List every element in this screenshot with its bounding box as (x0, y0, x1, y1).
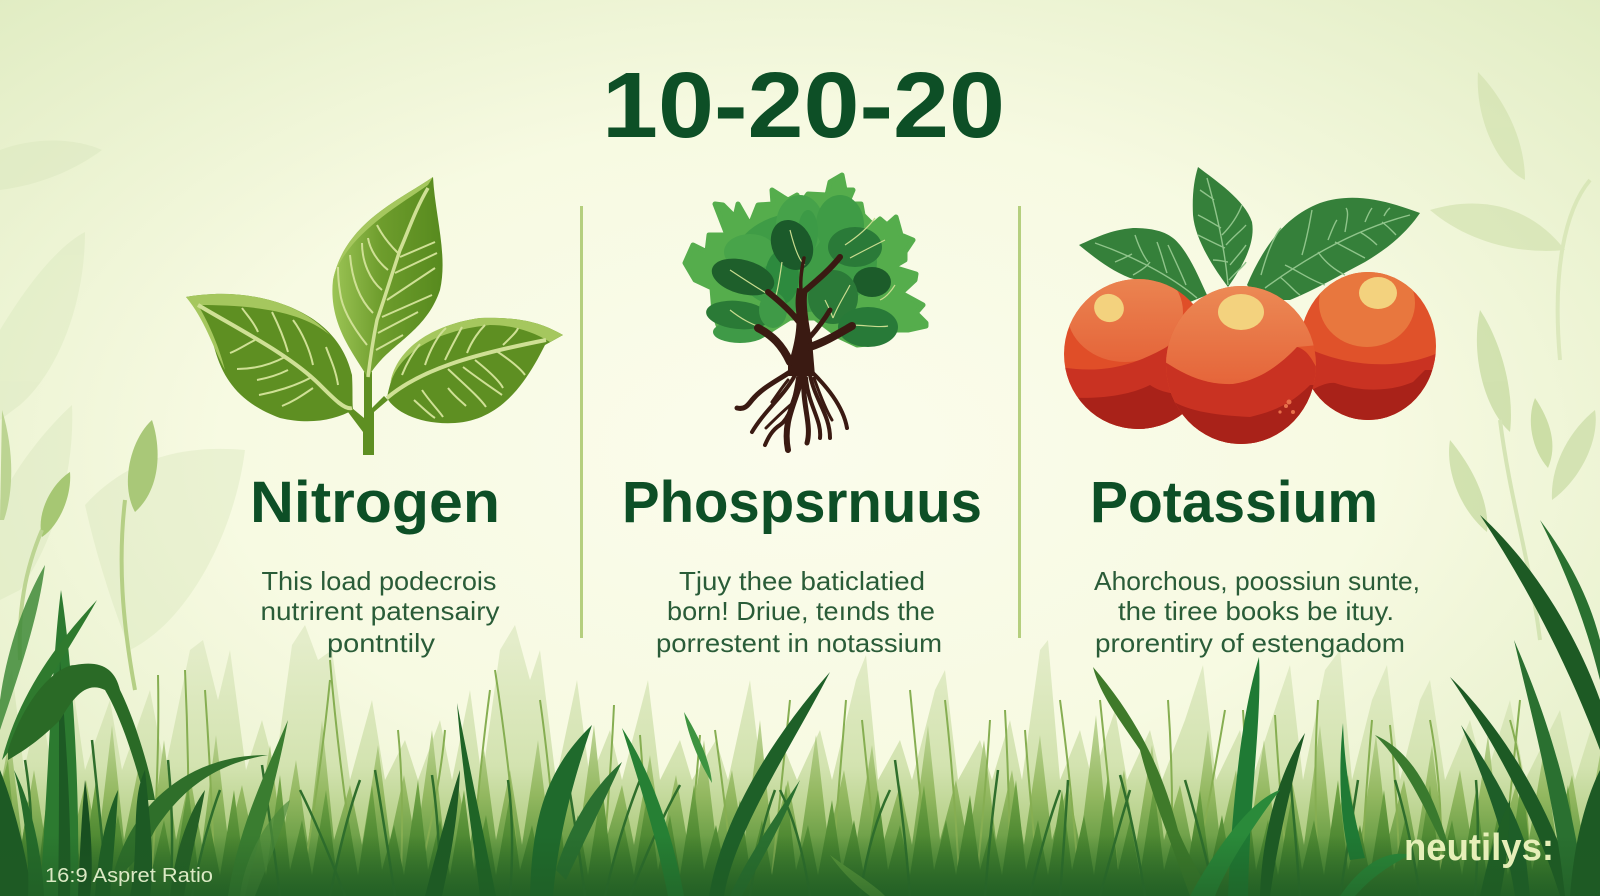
icon: three leaves (186, 177, 563, 455)
text: nitrogen description: pontntily (327, 628, 435, 658)
panel: potassium (1060, 167, 1440, 658)
logo: neutilys: (1404, 827, 1554, 869)
panel: nitrogen (186, 177, 563, 658)
thin grass stems (150, 660, 1530, 896)
text: nitrogen description (260, 566, 500, 658)
text: potassium description (1094, 566, 1420, 658)
text: phosphorus description (656, 566, 942, 658)
heading: potassium: Potassium (1090, 470, 1378, 535)
mid grass layer (0, 715, 1600, 896)
icon: tree with roots (685, 175, 926, 450)
dark grass layer (0, 760, 1600, 896)
icon: three red fruits with leaves (1060, 167, 1440, 445)
text: nitrogen description: This load podecrois (262, 566, 496, 596)
heading: phosphorus: Phospsrnuus (622, 470, 982, 535)
text: potassium description: Ahorchous, poossiun sunte, (1094, 566, 1420, 596)
small leaves: left (0, 410, 158, 690)
feature grass blades: left (0, 565, 288, 896)
feature grass blades: center (240, 672, 830, 896)
title: 10-20-20 (602, 53, 1005, 157)
text: phosphorus description: born! Driue, teınds the (667, 596, 935, 626)
heading: nitrogen: Nitrogen (250, 470, 500, 535)
background foliage: right (1430, 72, 1596, 640)
feature grass blades: right (830, 515, 1600, 896)
text: nitrogen description: nutrirent patensairy (260, 596, 500, 626)
text: phosphorus description: Tjuy thee baticlatied (679, 566, 925, 596)
background foliage: left (0, 141, 245, 650)
footer note: 16:9 Aspret Ratio (45, 865, 213, 887)
pale grass layer (0, 625, 1600, 896)
divider left (580, 206, 583, 638)
text: potassium description: prorentiry of estengadom (1095, 628, 1405, 658)
text: phosphorus description: porrestent in notassium (656, 628, 942, 658)
bottom shade (0, 835, 1600, 896)
dark thin grass stems (25, 740, 1478, 896)
panel: phosphorus (622, 175, 982, 658)
divider right (1018, 206, 1021, 638)
text: potassium description: the tiree books be ituy. (1118, 596, 1394, 626)
